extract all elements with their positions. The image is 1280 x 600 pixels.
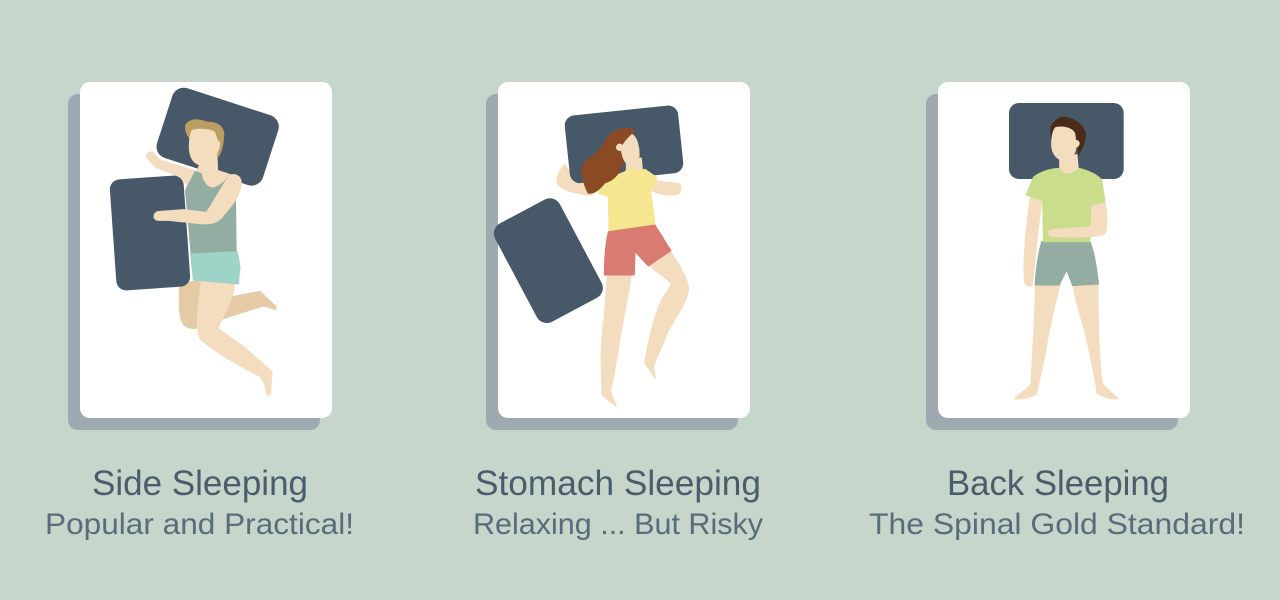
panel: stomach sleeping — [473, 82, 763, 541]
subheading: stomach sleeping: Relaxing ... But Risky — [473, 508, 763, 541]
mattress shadow — [68, 94, 320, 430]
panel: side sleeping — [45, 82, 354, 541]
subheading: side sleeping: Popular and Practical! — [45, 508, 354, 541]
heading: back sleeping: Back Sleeping — [947, 464, 1169, 503]
mattress shadow — [486, 94, 738, 430]
panel: back sleeping — [869, 82, 1245, 541]
mattress — [938, 82, 1190, 418]
heading: stomach sleeping: Stomach Sleeping — [475, 464, 761, 503]
heading: side sleeping: Side Sleeping — [92, 464, 308, 503]
mattress — [498, 82, 750, 418]
mattress shadow — [926, 94, 1178, 430]
stomach sleeper figure with pillows — [490, 105, 688, 406]
side sleeper figure with pillows — [109, 85, 282, 395]
subheading: back sleeping: The Spinal Gold Standard! — [869, 508, 1245, 541]
mattress — [80, 82, 332, 418]
back sleeper figure with pillow — [1009, 103, 1124, 399]
